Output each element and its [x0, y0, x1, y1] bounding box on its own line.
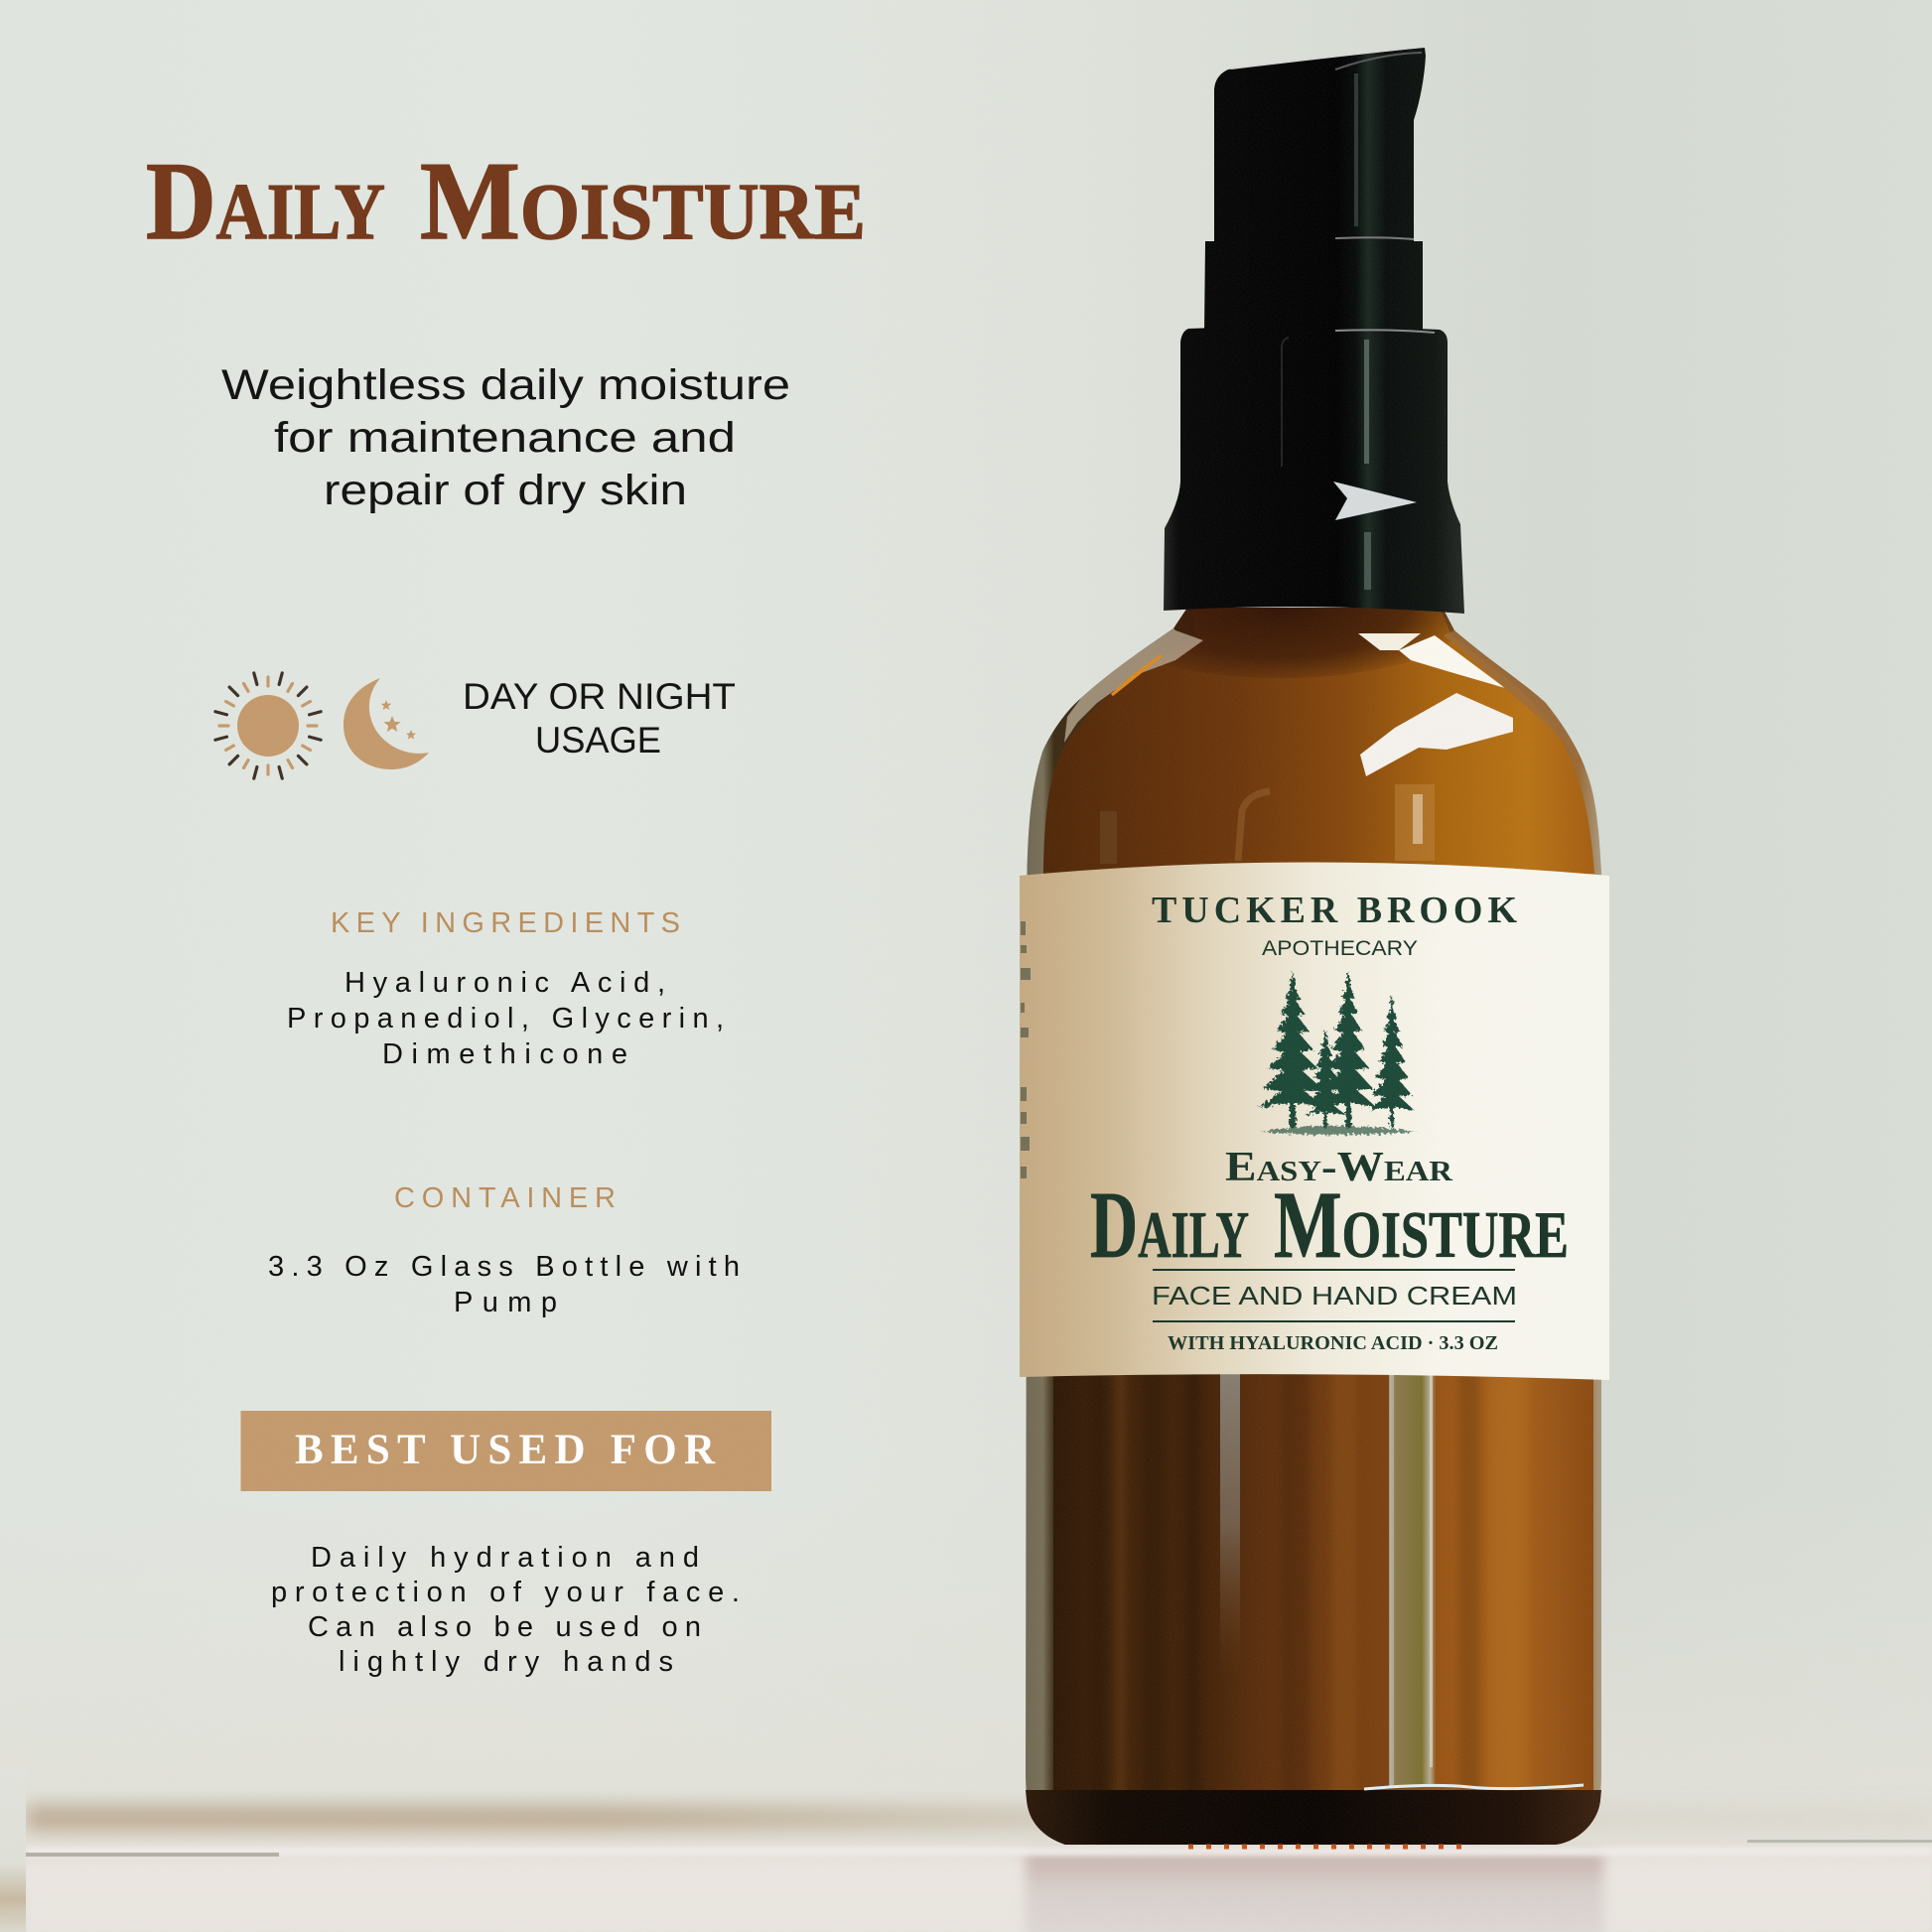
container description: Pump — [454, 1287, 557, 1318]
easy-wear line: Easy-Wear — [1225, 1145, 1453, 1190]
side ingredients marks — [1021, 921, 1031, 1178]
best used for description — [271, 1542, 740, 1678]
heading: Daily Moisture: Daily — [146, 137, 385, 264]
black pump head — [1164, 47, 1464, 614]
face and hand cream line: FACE AND HAND CREAM — [1152, 1281, 1517, 1311]
product bottle — [1020, 47, 1609, 1847]
container description — [268, 1251, 740, 1318]
label rules — [1153, 1269, 1515, 1322]
icon: sun — [215, 673, 321, 778]
container description: 3.3 Oz Glass Bottle with — [268, 1251, 740, 1283]
glass reflections — [1064, 628, 1586, 1847]
best used for description: protection of your face. — [271, 1577, 740, 1608]
icon: pine trees — [1259, 971, 1418, 1135]
tagline text: for maintenance and — [274, 414, 736, 462]
table surface and reflection — [0, 1767, 1932, 1932]
best used for banner — [240, 1411, 771, 1491]
brand name: TUCKER BROOK — [1152, 890, 1517, 931]
key ingredients list: Propanediol, Glycerin, — [287, 1003, 724, 1035]
key ingredients list: Hyaluronic Acid, — [345, 967, 665, 999]
best used for description: lightly dry hands — [339, 1646, 673, 1678]
key ingredients list — [287, 967, 724, 1070]
usage text — [463, 676, 736, 760]
usage text: DAY OR NIGHT — [463, 676, 736, 717]
best used for description: Can also be used on — [308, 1611, 701, 1643]
apothecary line: APOTHECARY — [1262, 937, 1418, 960]
heading: Daily Moisture: Moisture — [420, 137, 866, 264]
heading: Daily Moisture — [146, 137, 866, 264]
tagline text: repair of dry skin — [324, 467, 687, 514]
usage text: USAGE — [535, 720, 661, 760]
product name on label: Moisture — [1274, 1172, 1569, 1278]
best used for description: Daily hydration and — [311, 1542, 699, 1574]
container heading: CONTAINER — [394, 1182, 616, 1214]
tagline text: Weightless daily moisture — [221, 361, 790, 409]
key ingredients heading: KEY INGREDIENTS — [331, 907, 680, 939]
tagline text — [221, 361, 790, 514]
icon: crescent moon with stars — [344, 678, 429, 769]
best used for banner: BEST USED FOR — [295, 1427, 716, 1473]
key ingredients list: Dimethicone — [382, 1038, 627, 1070]
with hyaluronic acid line: WITH HYALURONIC ACID · 3.3 OZ — [1168, 1332, 1498, 1354]
product name on label: Daily — [1090, 1172, 1249, 1278]
product label — [1020, 862, 1609, 1380]
product name on label — [1090, 1172, 1569, 1278]
amber glass body — [1026, 563, 1601, 1845]
